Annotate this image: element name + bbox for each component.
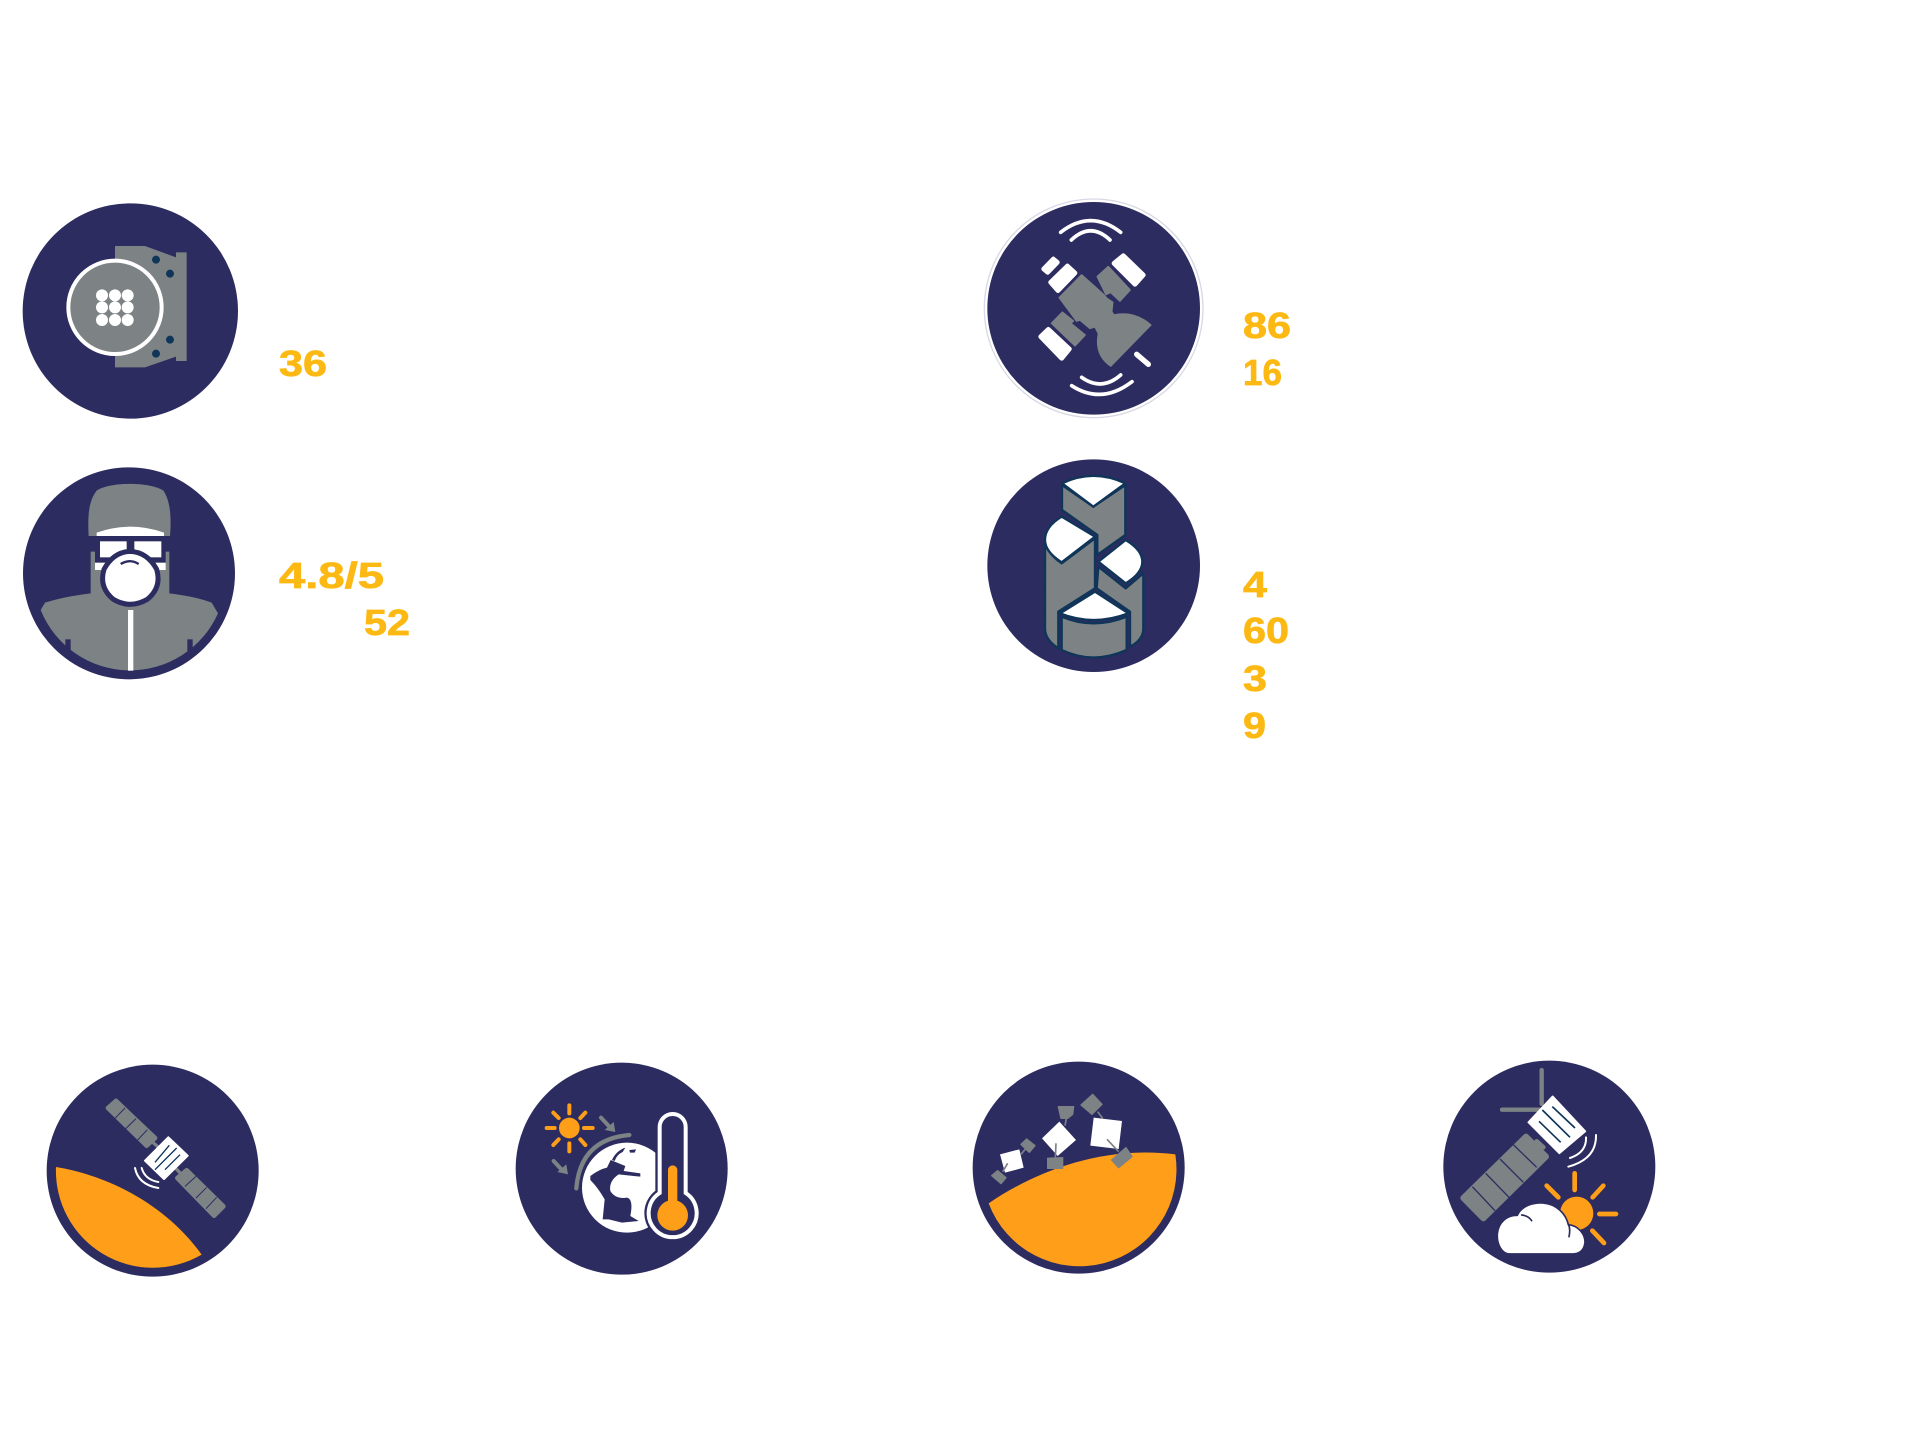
number: 16: 16	[1243, 352, 1282, 393]
icon: sensor lens	[23, 203, 238, 419]
icon: satellite with signal arcs	[984, 199, 1203, 418]
number: 4.8/5: 4.8/5	[279, 555, 384, 596]
number: 9: 9	[1243, 705, 1266, 746]
number: 4: 4	[1243, 564, 1267, 605]
icon: earth, sun and thermometer	[516, 1063, 728, 1275]
icon: technician in clean-room suit	[23, 467, 235, 679]
number: 3: 3	[1243, 658, 1267, 699]
number: 36: 36	[279, 343, 327, 384]
icon: weather satellite with sun and cloud	[1443, 1061, 1655, 1273]
number: 86: 86	[1243, 305, 1291, 346]
icon: debris around orange planet	[973, 1062, 1185, 1274]
icon: stacked cylinder segments	[987, 459, 1200, 672]
number: 52: 52	[364, 602, 410, 643]
icon: satellite over orange planet	[47, 1065, 259, 1277]
number: 60: 60	[1243, 610, 1289, 651]
